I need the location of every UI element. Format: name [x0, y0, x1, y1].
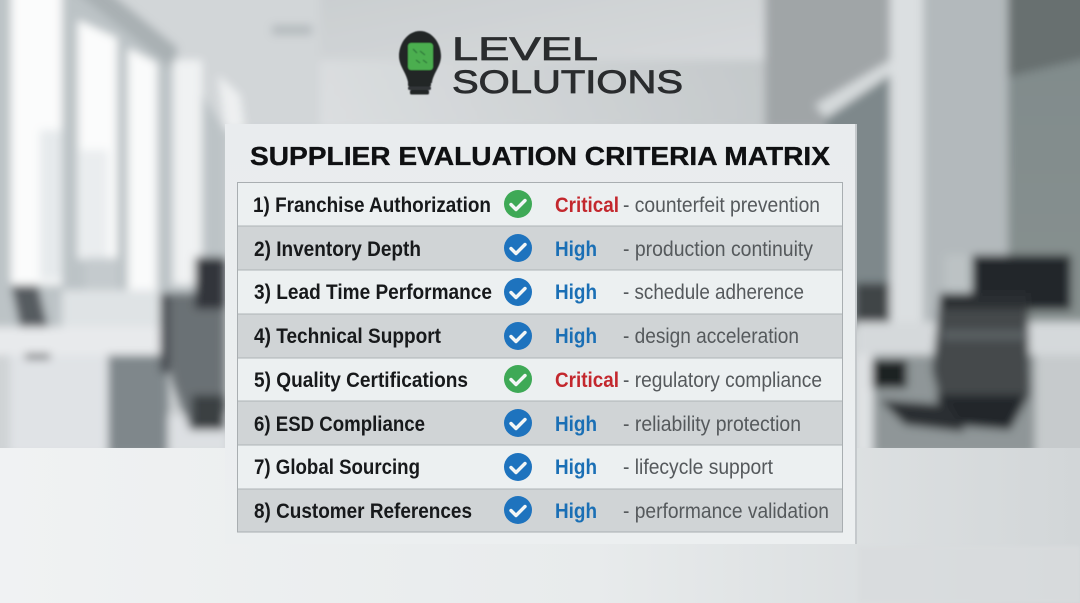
centre wall: [272, 25, 312, 35]
left window wall: [0, 0, 225, 340]
row 7: [254, 453, 773, 481]
logo wordmark: LEVEL: [452, 31, 598, 67]
right desk: [855, 322, 1080, 355]
icon: blue check: [504, 322, 532, 350]
logo wordmark: [452, 31, 683, 100]
row 1: Critical: [555, 193, 619, 217]
row 3: - schedule adherence: [623, 280, 804, 304]
row 7: High: [555, 455, 597, 479]
icon: light bulb: [399, 31, 441, 94]
row 3: 3) Lead Time Performance: [254, 280, 492, 304]
row 3: High: [555, 280, 597, 304]
right recess: [765, 0, 890, 130]
icon: blue check: [504, 453, 532, 481]
row 7: 7) Global Sourcing: [254, 455, 420, 479]
row 4: 4) Technical Support: [254, 324, 441, 348]
row 8: High: [555, 499, 597, 523]
row 5: 5) Quality Certifications: [254, 368, 468, 392]
row 8: [254, 496, 829, 524]
row 1: [253, 190, 820, 218]
row 7: - lifecycle support: [623, 455, 773, 479]
row 1: 1) Franchise Authorization: [253, 193, 491, 217]
row 2: 2) Inventory Depth: [254, 237, 421, 261]
left desk: [0, 327, 165, 355]
row 6: 6) ESD Compliance: [254, 412, 425, 436]
row 5: - regulatory compliance: [623, 368, 822, 392]
icon: blue check: [504, 496, 532, 524]
row 6: - reliability protection: [623, 412, 801, 436]
title: SUPPLIER EVALUATION CRITERIA MATRIX: [250, 141, 831, 171]
icon: blue check: [504, 278, 532, 306]
table rows: [237, 182, 843, 532]
icon: blue check: [504, 234, 532, 262]
right column and wall: [855, 125, 890, 290]
row 4: - design acceleration: [623, 324, 799, 348]
icon: green check: [504, 365, 532, 393]
row 5: [254, 365, 822, 393]
row 8: - performance validation: [623, 499, 829, 523]
row 4: High: [555, 324, 597, 348]
desk surface: [0, 448, 1080, 603]
left chair: [160, 293, 225, 430]
logo wordmark: SOLUTIONS: [452, 64, 683, 100]
icon: blue check: [504, 409, 532, 437]
logo: Level Solutions: [399, 31, 683, 100]
row 8: 8) Customer References: [254, 499, 472, 523]
row 3: [254, 278, 804, 306]
row 6: [254, 409, 801, 437]
row 6: High: [555, 412, 597, 436]
row 4: [254, 322, 799, 350]
right chair: [932, 293, 1030, 430]
right monitor: [972, 255, 1071, 310]
panel: criteria card: [225, 124, 857, 544]
row 2: [254, 234, 813, 262]
row 2: High: [555, 237, 597, 261]
icon: green check: [504, 190, 532, 218]
row 1: - counterfeit prevention: [623, 193, 820, 217]
row 2: - production continuity: [623, 237, 813, 261]
row 5: Critical: [555, 368, 619, 392]
